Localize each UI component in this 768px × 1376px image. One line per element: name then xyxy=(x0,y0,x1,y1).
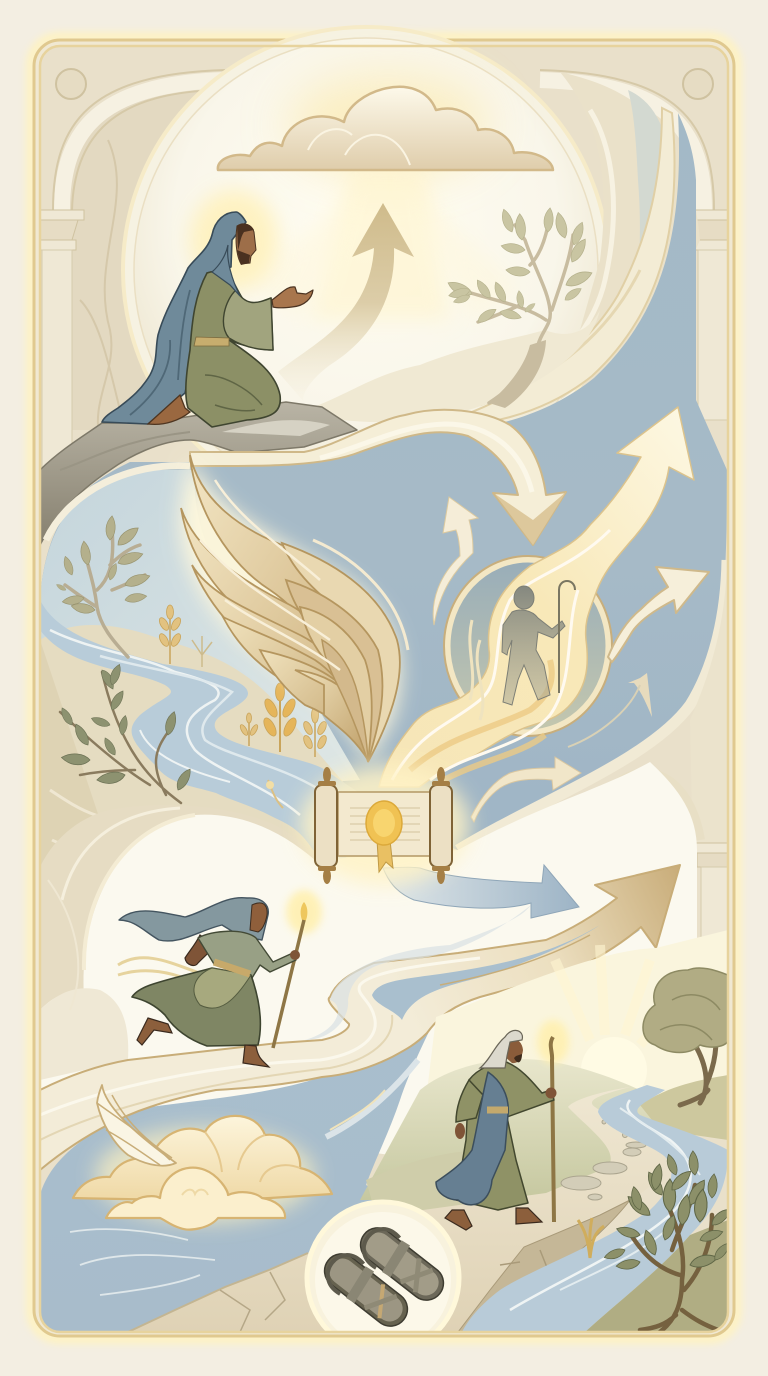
kneeling praying figure xyxy=(102,190,313,427)
torso xyxy=(198,931,296,978)
arrow rising to cloud xyxy=(278,203,414,402)
background arches and columns xyxy=(41,68,727,468)
left white rim of sky xyxy=(46,466,190,540)
lower glow panel xyxy=(40,762,697,1160)
small curl arrow xyxy=(628,673,652,717)
skirt xyxy=(132,968,260,1046)
golden cloud with small wing xyxy=(73,1085,332,1230)
cloud with rays xyxy=(218,87,553,170)
foot xyxy=(148,395,190,424)
sandals medallion xyxy=(307,1202,459,1354)
left olive tree xyxy=(55,515,151,657)
olive tree near circle xyxy=(446,207,594,408)
feet xyxy=(445,1210,472,1230)
feet xyxy=(137,1018,172,1045)
right arch beside blue field xyxy=(696,582,727,937)
sandy path and foreground xyxy=(128,1087,664,1332)
belt xyxy=(194,337,229,346)
right landscape with hills and sun xyxy=(360,930,728,1240)
right river xyxy=(462,1085,728,1332)
back arm xyxy=(185,935,215,965)
head xyxy=(250,903,267,932)
face xyxy=(236,224,256,264)
wind streaks xyxy=(118,958,205,985)
halo xyxy=(190,190,278,290)
middle blue sky field xyxy=(40,113,727,850)
left sleeve xyxy=(456,1080,483,1122)
robe xyxy=(186,272,280,427)
blue mantle xyxy=(102,212,246,424)
flowing golden flames and figure orb xyxy=(379,407,694,787)
golden wing xyxy=(180,455,408,762)
mantle front fold xyxy=(212,245,240,296)
scroll with seal xyxy=(300,765,470,885)
blue cloak xyxy=(436,1072,508,1205)
walking figure with staff xyxy=(436,1020,569,1230)
lake ripples xyxy=(70,1060,418,1295)
right side arrow xyxy=(608,567,709,662)
left ground hills xyxy=(41,625,343,864)
sleeve xyxy=(223,290,273,350)
small up arrow xyxy=(433,497,478,625)
olive tree lower right xyxy=(578,1151,733,1332)
golden wheat stalks xyxy=(157,605,328,757)
left river xyxy=(40,600,358,865)
side arrow xyxy=(471,757,581,822)
lower arch band xyxy=(42,814,147,1000)
rocky ledge xyxy=(40,402,357,545)
figure silhouette with staff xyxy=(502,581,575,705)
top glowing circle xyxy=(123,27,609,513)
sandal back xyxy=(352,1219,452,1309)
pale sky left side xyxy=(40,470,360,790)
running figure with staff xyxy=(118,890,322,1067)
robe xyxy=(456,1062,554,1210)
lower lake xyxy=(40,930,640,1332)
ribbons right of the circle xyxy=(472,73,700,420)
lower left olive branch xyxy=(59,663,194,803)
blue arrow under scroll xyxy=(383,865,579,918)
stepping stones xyxy=(561,1120,646,1200)
head xyxy=(504,1038,523,1063)
faint blue wake above arrow xyxy=(305,905,531,1040)
flying scarf xyxy=(119,898,268,941)
upper cream ribbon with down arrow xyxy=(190,410,566,545)
small wing xyxy=(97,1085,176,1166)
blue field rim xyxy=(458,560,727,850)
winding ribbon into golden arrow xyxy=(40,865,680,1170)
hill wave under the tree xyxy=(300,310,600,422)
sandal front xyxy=(316,1245,416,1335)
tree behind sun xyxy=(643,968,728,1105)
hand xyxy=(272,287,313,308)
